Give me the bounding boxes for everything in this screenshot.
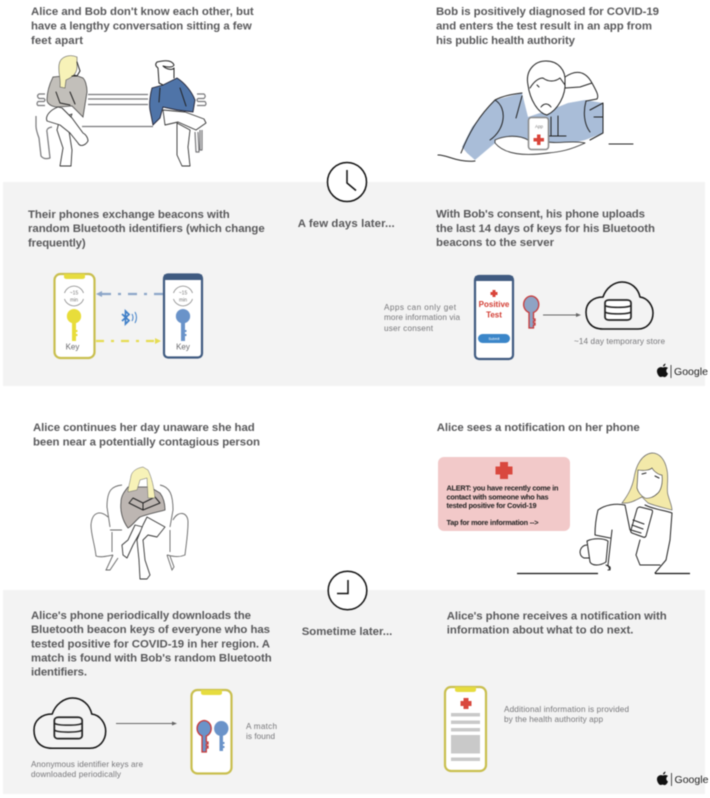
phone with app <box>528 118 548 150</box>
heading: Alice and Bob conversation: Alice and Bob don't know each other, but <box>31 6 254 18</box>
Bob torso <box>150 78 195 125</box>
heading: Alice's phone downloads keys: identifiers. <box>31 666 87 678</box>
icon: red cross <box>496 462 512 479</box>
hair <box>128 467 155 498</box>
icon: cloud database downloading <box>34 698 106 748</box>
Bob legs <box>177 123 190 166</box>
icon: Bob's phone with key: min <box>179 298 187 304</box>
illustration: Alice and Bob on a bench <box>36 56 206 166</box>
matched blue key <box>214 721 228 751</box>
text: a few days later: A few days later... <box>298 218 395 230</box>
face <box>637 468 662 498</box>
text: anonymous identifier keys: downloaded periodically <box>31 770 122 779</box>
icon: Alice's phone with key: min <box>70 298 78 304</box>
heading: Alice's phone downloads keys: match is found with Bob's random Bluetooth <box>31 652 272 664</box>
yellow key <box>67 309 81 341</box>
heading: Alice's phone downloads keys: Alice's phone periodically downloads the <box>31 610 251 622</box>
heading: phones exchange beacons: frequently) <box>28 238 86 250</box>
heading: phones exchange beacons: Their phones exchange beacons with <box>28 209 230 221</box>
heading: Bob's consent: With Bob's consent, his phone uploads <box>436 208 645 220</box>
callout: alert notification <box>438 457 570 531</box>
icon: Alice's phone with key: Key <box>66 342 79 352</box>
logo: Apple and Google lower <box>657 772 709 786</box>
callout: alert notification: Tap for more information --> <box>446 518 538 527</box>
icon: bluetooth signal <box>122 311 136 324</box>
logo: Apple and Google lower: Google <box>674 774 709 786</box>
table line <box>438 144 633 161</box>
icon: phone with positive test: Test <box>486 310 502 320</box>
icon: clock one <box>328 162 366 202</box>
Bob head <box>156 61 174 85</box>
logo: Apple and Google: Google <box>674 366 708 378</box>
logo: Apple and Google <box>657 364 708 378</box>
bench <box>36 94 206 159</box>
text: apps can only get information: more information via <box>384 313 460 322</box>
callout: alert notification: ALERT: you have recently come in <box>446 484 558 492</box>
table line <box>517 572 690 574</box>
Alice torso <box>47 75 87 117</box>
icon: phone with health authority app <box>445 687 486 771</box>
illustration: Alice with phone and cup <box>517 453 690 574</box>
Alice hair <box>59 56 77 88</box>
heading: Bob's consent: the last 14 days of keys for his Bluetooth <box>436 223 655 235</box>
torso <box>121 487 165 528</box>
heading: phones exchange beacons: random Bluetooth identifiers (which change <box>28 223 265 235</box>
icon: phone with matching keys <box>192 690 232 774</box>
icon: Alice's phone with key: ~15 <box>70 290 78 296</box>
body <box>595 504 672 573</box>
illustration: Bob using the app <box>438 61 633 161</box>
text: apps can only get information: Apps can only get <box>384 303 457 312</box>
text: additional information: by the health authority app <box>504 715 603 724</box>
panel: phones exchange and upload <box>3 182 705 386</box>
icon: clock two <box>328 571 367 610</box>
arrow: yellow beacon to Bob <box>96 338 161 344</box>
heading: Bob's consent: beacons to the server <box>436 237 555 249</box>
phone in hand <box>631 507 652 537</box>
heading: Alice's phone receives a notification: information about what to do next. <box>447 624 633 636</box>
heading: Alice continues her day: Alice continues her day unaware she had <box>33 422 255 434</box>
callout: alert notification: contact with someone who has <box>446 492 548 501</box>
arrow: blue beacon to Alice <box>96 291 163 297</box>
phone with app: App <box>535 124 543 129</box>
heading: Alice's phone receives a notification: Alice's phone receives a notification with <box>447 610 667 622</box>
icon: cloud database <box>586 282 653 329</box>
matched red key <box>197 720 211 752</box>
text: a match is found: A match <box>246 722 277 731</box>
Alice legs <box>57 114 72 166</box>
icon: Alice's phone with key <box>54 274 94 358</box>
heading: Alice and Bob conversation: have a lengthy conversation sitting a few <box>31 20 252 32</box>
text: sometime later: Sometime later... <box>302 626 392 638</box>
arrow: key to cloud <box>543 313 581 317</box>
heading: Bob diagnosed: his public health authority <box>436 35 576 47</box>
arrow: cloud to phone <box>116 722 177 726</box>
heading: Alice and Bob conversation: feet apart <box>31 35 83 47</box>
heading: Alice sees a notification: Alice sees a notification on her phone <box>437 422 640 434</box>
Bob head <box>527 61 565 115</box>
armchair <box>91 485 188 570</box>
text: 14 day temporary store: ~14 day temporary store <box>574 337 665 346</box>
text: a match is found: is found <box>246 732 275 741</box>
hands <box>495 136 585 154</box>
heading: Bob diagnosed: Bob is positively diagnosed for COVID-19 <box>436 6 659 18</box>
icon: phone with positive test: Positive <box>479 300 510 309</box>
hair <box>622 453 672 510</box>
icon: Bob's phone with key: ~15 <box>179 290 187 296</box>
text: apps can only get information: user consent <box>384 324 434 333</box>
heading: Bob diagnosed: and enters the test result in an app from <box>436 20 652 32</box>
callout: alert notification: tested positive for Covid-19 <box>446 501 536 510</box>
text: additional information: Additional information is provided <box>504 705 629 714</box>
blue key <box>176 309 190 341</box>
panel: download and notification <box>3 590 705 794</box>
icon: Bob's phone with key <box>164 274 202 358</box>
text: anonymous identifier keys: Anonymous identifier keys are <box>31 760 143 769</box>
icon: red and blue key <box>524 296 539 328</box>
heading: Alice continues her day: been near a potentially contagious person <box>33 436 260 448</box>
heading: Alice's phone downloads keys: Bluetooth beacon keys of everyone who has <box>31 624 270 636</box>
Bob jacket <box>462 93 603 160</box>
heading: Alice's phone downloads keys: tested positive for COVID-19 in her region. A <box>31 638 270 650</box>
icon: Bob's phone with key: Key <box>176 342 190 352</box>
book <box>129 497 160 510</box>
legs <box>122 525 143 558</box>
icon: phone with positive test <box>475 276 513 359</box>
icon: phone with positive test: Submit <box>489 337 499 341</box>
cup <box>580 539 608 565</box>
illustration: Alice in armchair <box>91 467 188 579</box>
